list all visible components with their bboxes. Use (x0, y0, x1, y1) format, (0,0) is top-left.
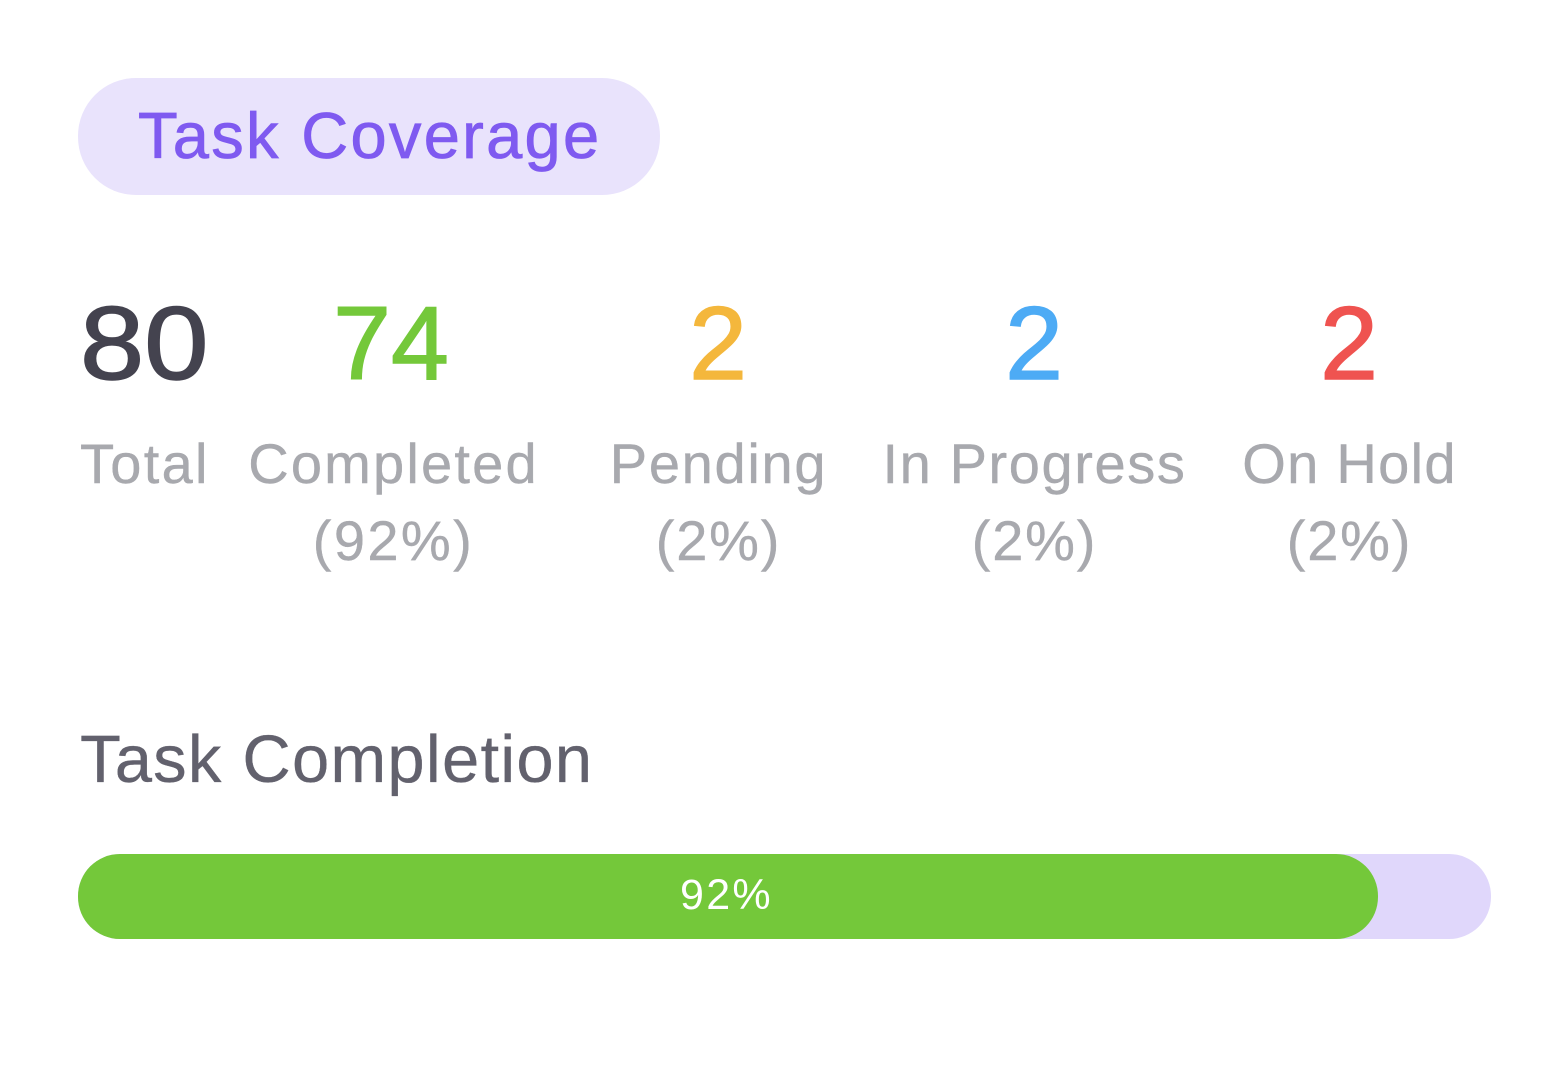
pending label: (2%) (656, 509, 781, 572)
in progress label: In Progress (883, 432, 1186, 495)
in progress label: (2%) (972, 509, 1097, 572)
completed label (248, 432, 539, 572)
on hold label: On Hold (1242, 432, 1457, 495)
stat: on hold (1242, 286, 1457, 572)
completed label: (92%) (313, 509, 474, 572)
total value: 80 (80, 286, 208, 402)
stat: in progress (883, 286, 1186, 572)
pending label (610, 432, 827, 572)
on hold label (1242, 432, 1457, 572)
in progress label (883, 432, 1186, 572)
completed label: Completed (248, 432, 539, 495)
total label: Total (80, 432, 210, 495)
in progress value: 2 (1005, 286, 1063, 402)
on hold value: 2 (1320, 286, 1378, 402)
progress fill (78, 854, 1378, 939)
on hold label: (2%) (1287, 509, 1412, 572)
stat: pending (610, 286, 827, 572)
stat: total (80, 286, 210, 495)
badge label: Task Coverage (138, 99, 601, 172)
heading: Task Completion: Task Completion (80, 722, 593, 797)
completed value: 74 (333, 286, 449, 402)
pending label: Pending (610, 432, 827, 495)
badge: Task Coverage (78, 78, 660, 195)
stat: completed (248, 286, 539, 572)
progress bar (78, 854, 1491, 939)
progress value: 92% (680, 871, 773, 919)
pending value: 2 (689, 286, 747, 402)
